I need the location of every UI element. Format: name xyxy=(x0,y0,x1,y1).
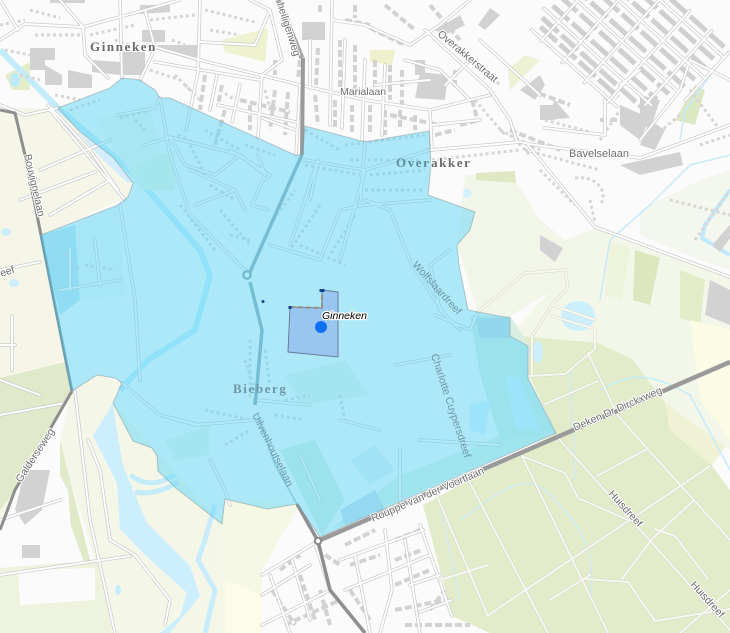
label: Ginneken point: Ginneken xyxy=(322,310,367,322)
place labels: Over xyxy=(396,155,431,170)
industrial white plots xyxy=(5,458,95,605)
street labels: Bavelselaan xyxy=(569,148,629,160)
place labels: Bieberg xyxy=(233,381,288,396)
study area polygon xyxy=(41,78,556,537)
parcel dashed edge xyxy=(290,291,322,308)
place labels: Ginneken xyxy=(90,39,157,54)
street labels: heiligenweg xyxy=(274,1,303,58)
street labels: Huisdreef xyxy=(606,488,645,529)
selected parcel xyxy=(288,290,338,357)
street labels: Deken Dr Dirckxweg xyxy=(571,385,664,434)
street labels: Galderseweg xyxy=(13,426,57,485)
street labels: Rouppe van der Voortlaan xyxy=(369,465,486,525)
street labels: Uilvenhoutselaan xyxy=(249,411,295,489)
place labels: akker xyxy=(431,155,472,170)
street labels: Huisdreef xyxy=(688,579,727,620)
street labels: Bouvignelaan xyxy=(21,153,47,218)
underlying green and park shapes inside the boundary xyxy=(41,105,556,535)
location point xyxy=(315,321,327,333)
place labels: Marialaan xyxy=(340,86,386,98)
place labels xyxy=(90,39,472,396)
street labels: Charlotte Cuypersdreef xyxy=(428,352,473,459)
street labels: Wolfslaardreef xyxy=(410,259,464,317)
vertex markers xyxy=(262,289,324,309)
street labels: Overakkerstraat xyxy=(435,28,500,85)
